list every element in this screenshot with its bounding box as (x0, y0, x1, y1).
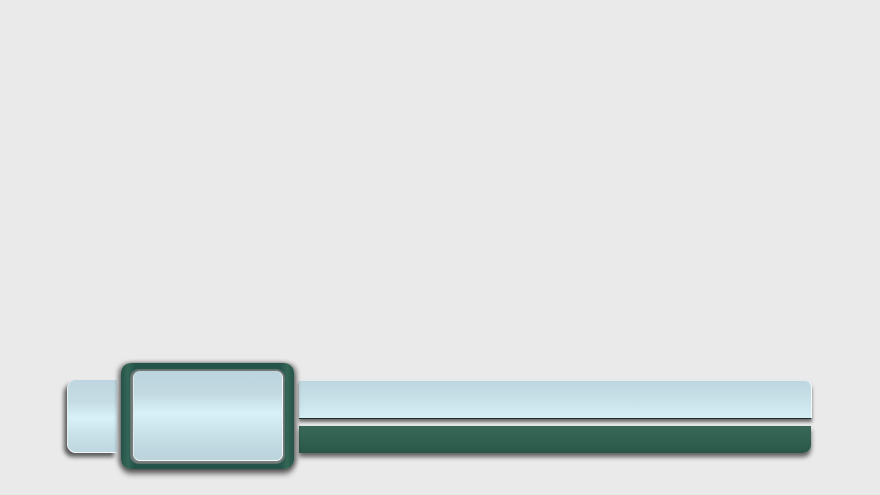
panel: central light screen (133, 371, 283, 461)
panel: dark green frame (121, 363, 294, 469)
panel: bottom dark green bar (299, 426, 811, 453)
panel: left light tab (67, 380, 117, 453)
grey inner ring (130, 369, 285, 464)
panel: top light bar (299, 380, 812, 419)
